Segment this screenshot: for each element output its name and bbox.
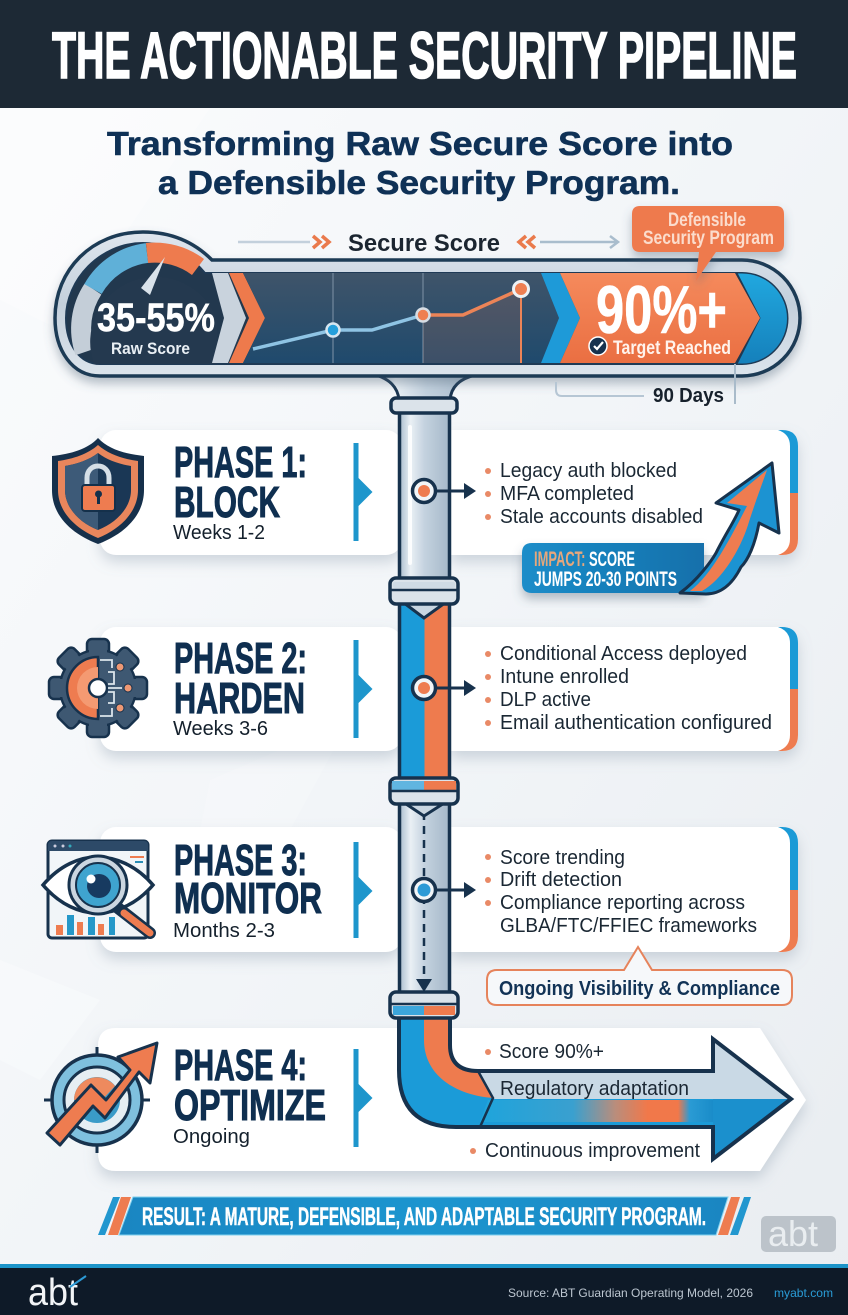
result banner bbox=[98, 1197, 751, 1235]
icon: target with rising arrow bbox=[44, 1043, 157, 1153]
impact callout with rising arrow bbox=[522, 463, 779, 594]
bullets: Conditional Access deployed bbox=[500, 643, 747, 665]
target panel: Target Reached bbox=[613, 338, 731, 359]
timeframe: Weeks 3-6 bbox=[173, 718, 268, 740]
silver and orange chevron bbox=[212, 273, 246, 363]
heading: BLOCK bbox=[174, 478, 280, 527]
bullets bbox=[485, 847, 757, 937]
subtitle: Transforming Raw Secure Score into bbox=[107, 125, 733, 162]
divider arrow bbox=[354, 1049, 372, 1147]
bullets: Drift detection bbox=[500, 869, 622, 891]
bullets: MFA completed bbox=[500, 483, 634, 505]
secure score label with arrows: Secure Score bbox=[348, 230, 500, 257]
title banner bbox=[0, 0, 848, 108]
node 3 bbox=[412, 878, 476, 902]
panel: phase 4 bbox=[44, 1028, 806, 1171]
website: myabt.com bbox=[774, 1286, 833, 1300]
logo: abt bbox=[28, 1272, 78, 1314]
icon: eye, magnifier and dashboard bbox=[43, 841, 153, 938]
subtitle bbox=[107, 125, 733, 201]
panel: phase 1 bbox=[52, 430, 798, 555]
divider arrow bbox=[354, 842, 372, 938]
impact callout with rising arrow: JUMPS 20-30 POINTS bbox=[534, 568, 677, 591]
bullets: GLBA/FTC/FFIEC frameworks bbox=[500, 915, 757, 937]
segment 1 silver bbox=[400, 400, 450, 580]
icon: gear with circuit bbox=[49, 639, 147, 737]
blue chevron bbox=[541, 273, 580, 363]
divider arrow bbox=[354, 640, 372, 738]
bullets bbox=[485, 643, 772, 734]
phase 4 outcomes: Regulatory adaptation bbox=[500, 1078, 689, 1100]
icon: shield with padlock bbox=[52, 438, 144, 544]
heading bbox=[174, 438, 307, 527]
bullets: Stale accounts disabled bbox=[500, 506, 703, 528]
callout: defensible security program bbox=[632, 206, 784, 281]
node 1 bbox=[412, 480, 476, 502]
panel: phase 3 bbox=[43, 827, 798, 952]
bullets: Legacy auth blocked bbox=[500, 460, 677, 482]
heading: HARDEN bbox=[174, 674, 305, 723]
phase 4 outcomes: Score 90%+ bbox=[499, 1041, 604, 1063]
heading: OPTIMIZE bbox=[174, 1081, 326, 1130]
pipeline elbow and output arrow bbox=[399, 1012, 791, 1159]
callout: ongoing visibility and compliance: Ongoing Visibility & Compliance bbox=[499, 978, 780, 1000]
bullets: DLP active bbox=[500, 689, 591, 711]
watermark logo: abt bbox=[768, 1213, 818, 1254]
gauge: 35-55% bbox=[97, 296, 215, 340]
callout: defensible security program: Defensible bbox=[668, 210, 746, 231]
heading: MONITOR bbox=[174, 874, 322, 923]
collar 1 bbox=[391, 398, 457, 413]
node 2 bbox=[412, 676, 476, 700]
watermark logo bbox=[761, 1213, 836, 1254]
phase 4 outcomes bbox=[470, 1041, 700, 1162]
secure score label with arrows bbox=[238, 230, 618, 257]
bullets bbox=[485, 460, 703, 528]
subtitle: a Defensible Security Program. bbox=[158, 164, 680, 201]
collar 2 bbox=[390, 578, 458, 618]
bullets: Email authentication configured bbox=[500, 712, 772, 734]
gauge: Raw Score bbox=[111, 339, 190, 358]
heading bbox=[174, 836, 322, 923]
bullets: Score trending bbox=[500, 847, 625, 869]
top pipe: score gauge to target bbox=[55, 232, 800, 376]
heading: PHASE 4: bbox=[174, 1041, 307, 1090]
collar 3 bbox=[390, 778, 458, 816]
phase 4 outcomes: Continuous improvement bbox=[485, 1140, 700, 1162]
target panel bbox=[560, 272, 760, 363]
timeframe: Weeks 1-2 bbox=[173, 522, 265, 544]
segment 3 silver with dashed flow arrow bbox=[400, 800, 450, 995]
bullets: Compliance reporting across bbox=[500, 892, 745, 914]
blue end section bbox=[737, 273, 788, 364]
pipeline: vertical pipe segments bbox=[390, 398, 476, 995]
heading bbox=[174, 1041, 326, 1130]
90 days marker bbox=[556, 364, 735, 407]
bullets: Intune enrolled bbox=[500, 666, 629, 688]
callout: ongoing visibility and compliance bbox=[487, 947, 792, 1005]
divider arrow bbox=[354, 443, 372, 541]
heading bbox=[174, 634, 307, 723]
gauge bbox=[81, 253, 217, 364]
timeframe: Ongoing bbox=[173, 1126, 250, 1148]
timeframe: Months 2-3 bbox=[173, 920, 275, 942]
heading: PHASE 2: bbox=[174, 634, 307, 683]
footer bbox=[0, 1264, 848, 1315]
callout: defensible security program: Security Program bbox=[643, 228, 774, 249]
90 days marker: 90 Days bbox=[653, 385, 724, 407]
source: Source: ABT Guardian Operating Model, 2026 bbox=[508, 1286, 753, 1300]
target panel: 90%+ bbox=[596, 272, 727, 348]
impact callout with rising arrow: IMPACT: SCORE bbox=[534, 548, 635, 571]
vertical pipe flare bbox=[372, 374, 480, 400]
collar 4 bbox=[390, 992, 458, 1018]
heading: PHASE 1: bbox=[174, 438, 307, 487]
segment 2 blue and orange bbox=[400, 600, 450, 780]
heading: PHASE 3: bbox=[174, 836, 307, 885]
panel: phase 2 bbox=[49, 627, 798, 751]
line chart bbox=[243, 273, 559, 363]
